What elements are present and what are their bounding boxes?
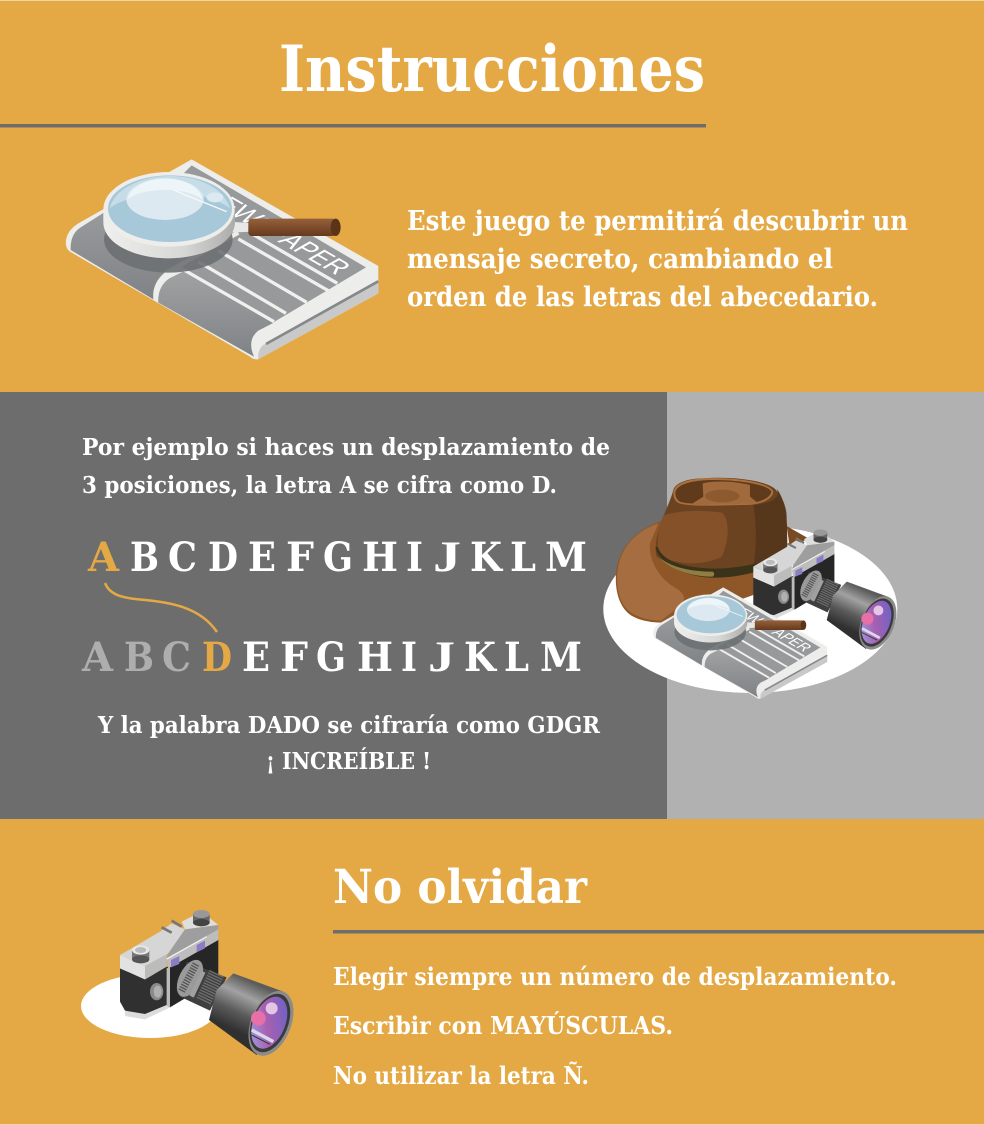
alphabet row: shifted: D bbox=[202, 634, 232, 681]
alphabet row: shifted: J bbox=[428, 634, 455, 681]
panel: example dark bbox=[0, 392, 667, 819]
icon: small newspaper with magnifier bbox=[653, 587, 827, 699]
icon: small camera bbox=[753, 529, 904, 655]
alphabet row: shifted: F bbox=[280, 634, 308, 681]
heading: No olvidar: No olvidar bbox=[333, 860, 588, 915]
text block: example intro bbox=[82, 434, 610, 499]
text block: example result: Y la palabra DADO se cifraría como GDGR bbox=[97, 712, 601, 739]
alphabet row: original bbox=[87, 534, 587, 581]
alphabet row: shifted: B bbox=[124, 634, 154, 681]
icon: hat bbox=[616, 478, 808, 622]
alphabet row: original: A bbox=[87, 534, 120, 581]
newspaper label: NEWSPAPER bbox=[193, 184, 358, 278]
text block: reminders: Escribir con MAYÚSCULAS. bbox=[333, 1011, 673, 1040]
alphabet row: shifted: G bbox=[316, 634, 346, 681]
alphabet row: shifted: L bbox=[504, 634, 529, 681]
alphabet row: original: H bbox=[362, 534, 398, 581]
alphabet row: shifted bbox=[81, 634, 582, 681]
text block: intro: mensaje secreto, cambiando el bbox=[407, 244, 833, 275]
icon: newspaper with magnifier bbox=[66, 159, 378, 359]
alphabet row: shifted: M bbox=[540, 634, 582, 681]
alphabet row: original: G bbox=[323, 534, 353, 581]
text block: example result: ¡ INCREÍBLE ! bbox=[266, 748, 431, 775]
alphabet row: original: K bbox=[470, 534, 503, 581]
panel: top background bbox=[0, 0, 984, 392]
alphabet row: shifted: K bbox=[464, 634, 497, 681]
alphabet row: original: C bbox=[168, 534, 197, 581]
text block: example intro: Por ejemplo si haces un desplazamiento de bbox=[82, 434, 610, 461]
text block: intro bbox=[407, 206, 908, 313]
alphabet row: original: F bbox=[286, 534, 314, 581]
alphabet row: original: J bbox=[433, 534, 461, 581]
text block: example result bbox=[97, 712, 601, 775]
icon: camera on white plate bbox=[81, 910, 302, 1062]
alphabet row: original: L bbox=[510, 534, 536, 581]
arrow: A to D bbox=[105, 583, 217, 632]
alphabet row: shifted: C bbox=[162, 634, 191, 681]
alphabet row: original: B bbox=[130, 534, 159, 581]
alphabet row: shifted: A bbox=[81, 634, 114, 681]
text block: example intro: 3 posiciones, la letra A se cifra como D. bbox=[82, 472, 557, 499]
alphabet row: original: I bbox=[406, 534, 423, 581]
small newspaper label: NEWSPAPER bbox=[723, 601, 815, 654]
panel: example light bbox=[667, 392, 984, 819]
alphabet row: shifted: H bbox=[357, 634, 393, 681]
alphabet row: shifted: I bbox=[401, 634, 417, 681]
alphabet row: original: M bbox=[545, 534, 587, 581]
text block: intro: Este juego te permitirá descubrir un bbox=[407, 206, 908, 237]
text block: reminders: Elegir siempre un número de desplazamiento. bbox=[333, 962, 897, 991]
text block: intro: orden de las letras del abecedario. bbox=[407, 282, 878, 313]
panel: bottom background bbox=[0, 819, 984, 1125]
text block: reminders: No utilizar la letra Ñ. bbox=[333, 1061, 589, 1090]
alphabet row: shifted: E bbox=[242, 634, 270, 681]
icon: white plate with hat, camera and newspaper bbox=[603, 478, 904, 699]
alphabet row: original: D bbox=[208, 534, 238, 581]
title: Instrucciones: Instrucciones bbox=[279, 32, 705, 107]
text block: reminders bbox=[333, 962, 897, 1090]
alphabet row: original: E bbox=[248, 534, 276, 581]
